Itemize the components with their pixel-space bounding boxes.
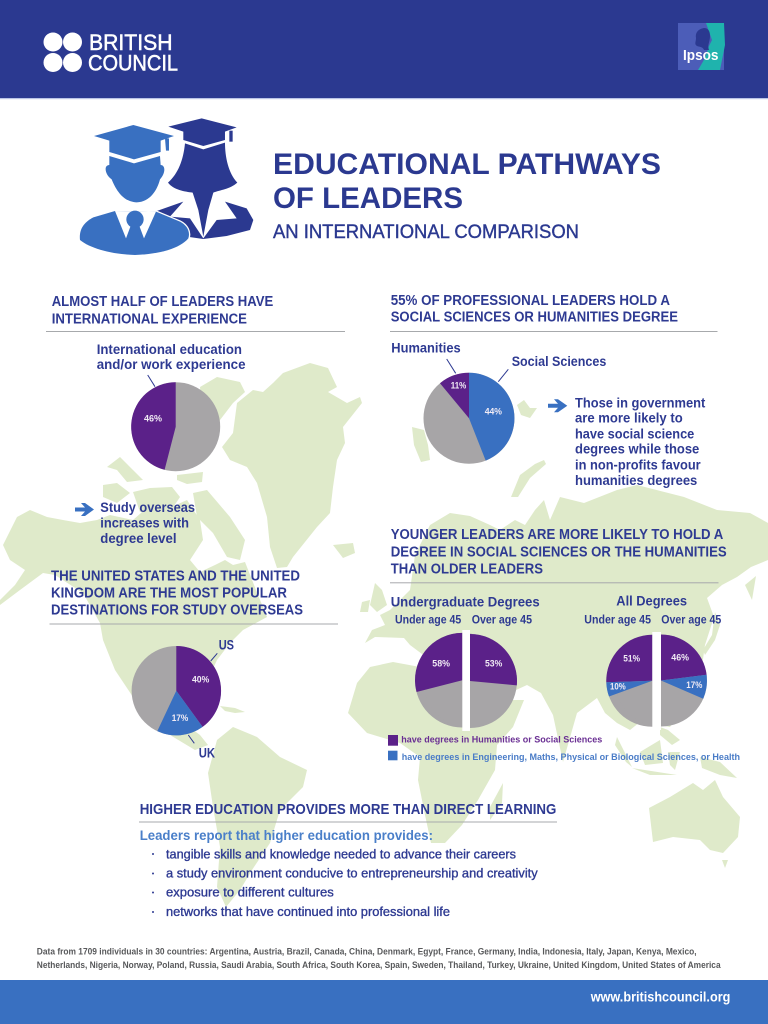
chart: undergraduate degrees: Undergraduate Degrees [391, 595, 540, 610]
pie chart: humanities and social sciences: 44% [485, 406, 503, 417]
footer band [0, 980, 768, 1024]
chart: undergraduate degrees: 58% [432, 659, 451, 670]
chart: all degrees: Under age 45 [584, 613, 651, 627]
title: EDUCATIONAL PATHWAYS [273, 148, 661, 181]
callout: government and non-profits: have social science [575, 426, 695, 441]
panel: higher education benefits [139, 801, 557, 919]
pie label: and/or work experience [97, 357, 246, 372]
bullet list [152, 846, 538, 919]
chart: undergraduate degrees: Under age 45 [395, 613, 462, 627]
legend [388, 735, 740, 763]
callout: government and non-profits: humanities degrees [575, 473, 697, 488]
callout: government and non-profits: Those in government [575, 395, 706, 410]
callout: government and non-profits: degrees while those [575, 441, 700, 456]
panel: degree subjects [390, 293, 718, 488]
pie chart: humanities and social sciences: 11% [451, 381, 467, 392]
pie label [97, 342, 246, 372]
panel: international experience [46, 294, 345, 546]
callout: study overseas: increases with [100, 516, 189, 531]
bullet list: networks that have continued into professional life [166, 904, 450, 919]
Ipsos logo: Ipsos [683, 47, 718, 64]
callout: study overseas [100, 500, 195, 546]
bullet list: tangible skills and knowledge needed to advance their careers [166, 846, 516, 861]
arrow [75, 503, 94, 516]
heading: younger leaders: THAN OLDER LEADERS [391, 561, 543, 577]
heading: younger leaders: YOUNGER LEADERS ARE MORE LIKELY TO HOLD A [391, 527, 724, 543]
header band [0, 0, 768, 99]
panel: younger and older leaders [388, 527, 740, 763]
callout: study overseas: Study overseas [100, 500, 195, 515]
chart: all degrees: 51% [623, 654, 640, 665]
heading: degree subjects: SOCIAL SCIENCES OR HUMANITIES DEGREE [391, 309, 678, 325]
heading: study destinations: DESTINATIONS FOR STUDY OVERSEAS [51, 602, 303, 618]
chart: all degrees: 46% [671, 653, 690, 664]
world map background [0, 363, 768, 907]
pie chart: humanities and social sciences [391, 340, 606, 464]
callout: government and non-profits: are more likely to [575, 411, 683, 426]
British Council logo [44, 30, 178, 76]
heading: international experience: ALMOST HALF OF LEADERS HAVE [52, 294, 274, 310]
bullet list: a study environment conducive to entrepreneurship and creativity [166, 866, 538, 881]
subheading: Leaders report that higher education provides: [140, 827, 433, 843]
heading: study destinations: KINGDOM ARE THE MOST POPULAR [51, 586, 287, 602]
heading: international experience: INTERNATIONAL EXPERIENCE [52, 312, 247, 328]
heading: benefits: HIGHER EDUCATION PROVIDES MORE THAN DIRECT LEARNING [140, 801, 556, 818]
pie chart: US and UK: 17% [172, 713, 189, 724]
chart: all degrees: All Degrees [616, 594, 687, 608]
pie chart: humanities and social sciences: Humanities [391, 340, 461, 355]
data source note [37, 947, 722, 970]
chart: all degrees: Over age 45 [661, 613, 722, 627]
data source note: Data from 1709 individuals in 30 countries: Argentina, Austria, Brazil, Canada, China, Denmark, Egypt, France, Germany, India, Indonesia, Italy, Japan, Kenya, Mexico, [37, 947, 697, 957]
pie label: International education [97, 342, 242, 357]
British Council logo: COUNCIL [88, 50, 178, 76]
pie chart: 46%: 46% [144, 414, 163, 425]
chart: undergraduate degrees: 53% [485, 659, 503, 670]
heading: degree subjects [391, 293, 678, 325]
chart: undergraduate degrees [391, 595, 540, 731]
pie chart: US and UK: UK [199, 746, 215, 761]
heading: younger leaders [391, 527, 727, 577]
callout: study overseas: degree level [100, 531, 176, 546]
data source note: Netherlands, Nigeria, Norway, Poland, Russia, Saudi Arabia, South Africa, South Korea, Spain, Sweden, Thailand, Turkey, Ukraine, United Kingdom, United States of America [37, 960, 722, 970]
pie chart: humanities and social sciences: Social Sciences [512, 354, 606, 369]
heading: degree subjects: 55% OF PROFESSIONAL LEADERS HOLD A [391, 293, 670, 309]
legend: have degrees in Humanities or Social Sciences [401, 735, 602, 746]
title: AN INTERNATIONAL COMPARISON [273, 221, 579, 243]
heading: study destinations [51, 569, 303, 618]
footer band: www.britishcouncil.org [590, 990, 730, 1005]
panel: study destinations [50, 569, 338, 761]
callout: government and non-profits [575, 395, 706, 488]
title [273, 148, 661, 243]
heading: study destinations: THE UNITED STATES AND THE UNITED [51, 569, 300, 585]
title: OF LEADERS [273, 182, 463, 215]
legend: have degrees in Engineering, Maths, Physical or Biological Sciences, or Health [402, 752, 740, 763]
arrow [548, 399, 567, 412]
heading: younger leaders: DEGREE IN SOCIAL SCIENCES OR THE HUMANITIES [391, 545, 727, 561]
chart: all degrees: 10% [610, 682, 626, 693]
pie chart: US and UK: 40% [192, 674, 210, 685]
Ipsos logo [678, 23, 725, 70]
chart: undergraduate degrees: Over age 45 [472, 613, 532, 627]
pie chart: US and UK: US [219, 637, 234, 652]
chart: all degrees: 17% [686, 680, 703, 691]
pie chart: 46% [131, 375, 220, 471]
bullet list: exposure to different cultures [166, 885, 334, 900]
British Council logo: BRITISH [89, 30, 172, 55]
callout: government and non-profits: in non-profits favour [575, 457, 701, 472]
pie chart: US and UK [132, 637, 234, 761]
icon: graduates [80, 118, 253, 255]
chart: all degrees [584, 594, 722, 730]
heading: international experience [52, 294, 274, 328]
